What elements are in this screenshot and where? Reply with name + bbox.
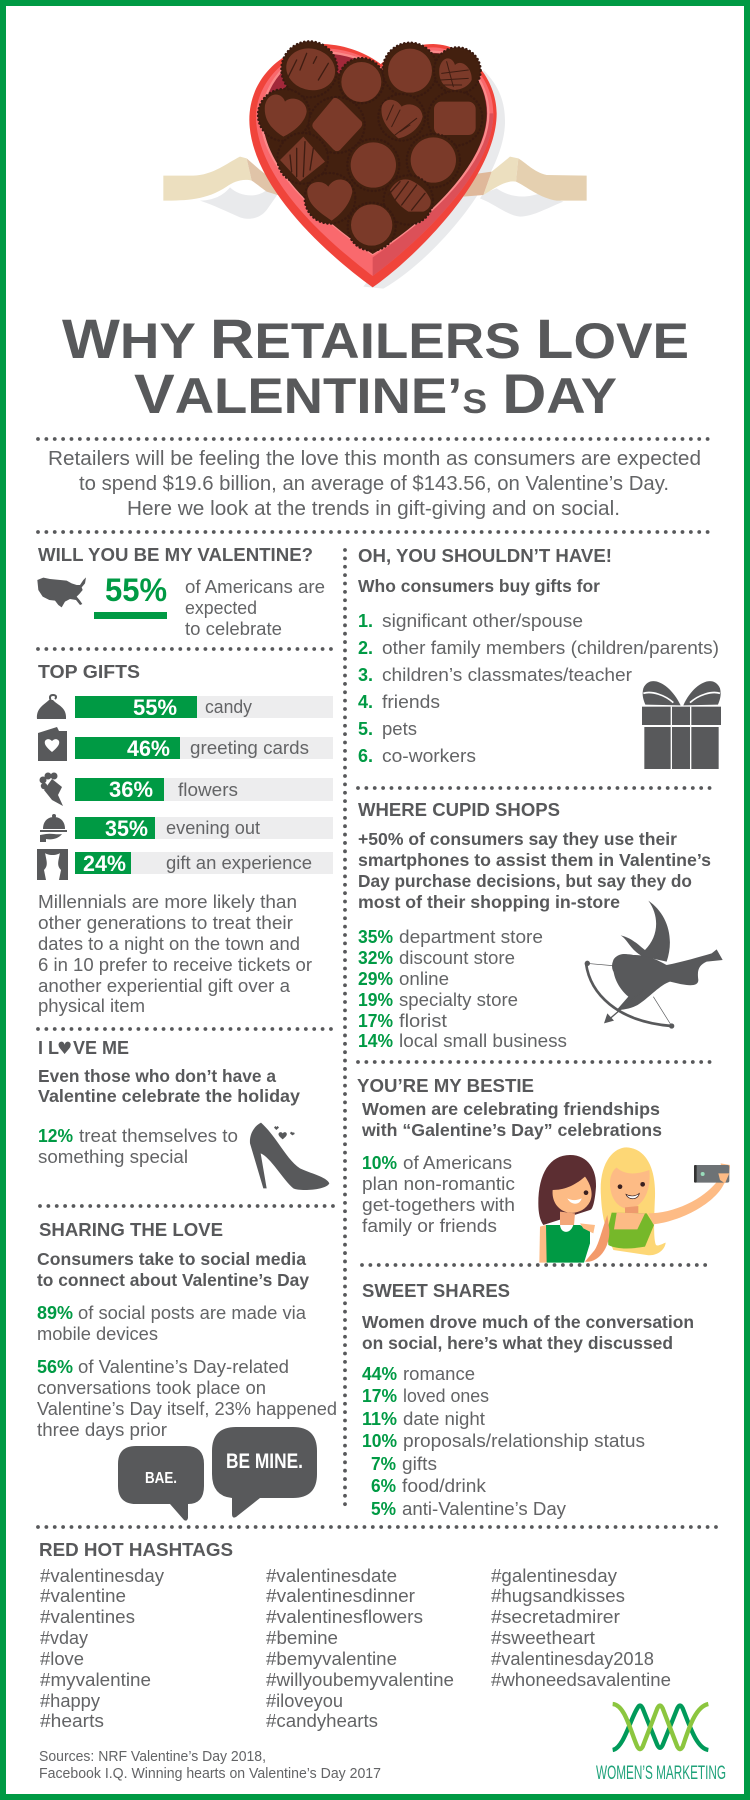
store list: department store: [399, 926, 543, 947]
topics list: proposals/relationship status: [403, 1430, 645, 1451]
heading: WILL YOU BE MY VALENTINE?: [38, 545, 313, 565]
hashtags column 1: #love: [40, 1648, 84, 1669]
heading: WHERE CUPID SHOPS: [358, 800, 560, 820]
subhead: on social, here’s what they discussed: [362, 1333, 673, 1353]
bar: candy: candy: [205, 696, 253, 717]
bar: candy: [75, 695, 333, 720]
store list: discount store: [399, 947, 515, 968]
intro text: Retailers will be feeling the love this month as consumers are expected: [48, 448, 701, 470]
text: millennials: another experiential gift over a: [38, 975, 291, 996]
stat: 56 percent: Valentine’s Day itself, 23% happened: [37, 1398, 337, 1419]
stat: 10 percent: 10%: [362, 1153, 397, 1173]
hashtags column 2: #iloveyou: [266, 1690, 343, 1711]
store list: 29%: [358, 969, 393, 989]
subhead: +50% of consumers say they use their: [358, 829, 677, 849]
bar: evening out: [75, 816, 333, 841]
hashtags column 3: #sweetheart: [491, 1627, 595, 1648]
illustration: two friends taking a selfie: [538, 1147, 730, 1263]
ranked list: 3.: [358, 665, 373, 685]
sources: Sources: NRF Valentine’s Day 2018,: [39, 1748, 266, 1765]
heading: OH, YOU SHOULDN’T HAVE!: [358, 546, 612, 566]
stat: 12 percent: [38, 1125, 238, 1167]
bar: gift an experience: [75, 851, 333, 876]
heading: ♥: [57, 1039, 72, 1059]
subhead: Day purchase decisions, but say they do: [358, 871, 692, 891]
stat: 55 percent: 55%: [105, 572, 167, 608]
ranked list: other family members (children/parents): [382, 637, 719, 658]
hashtags column 1: #myvalentine: [40, 1669, 151, 1690]
text: millennials: other generations to treat their: [38, 912, 293, 933]
icon: US map: [37, 577, 86, 607]
subhead: [38, 1066, 300, 1106]
store list: online: [399, 968, 449, 989]
panel: sharing the love: [37, 1220, 337, 1521]
topics list: 10%: [362, 1431, 397, 1451]
subhead: Even those who don’t have a: [38, 1066, 276, 1086]
ranked list: co-workers: [382, 745, 476, 766]
panel: you're my bestie: [357, 1076, 730, 1263]
ranked list: 6.: [358, 746, 373, 766]
panel: where cupid shops: [358, 800, 723, 1051]
icon: candy: [37, 695, 66, 719]
bar: evening out: 35%: [105, 816, 148, 841]
stat: 56 percent: [37, 1356, 337, 1440]
title: VALENTINE’ S DAY: [134, 362, 617, 425]
subhead: [361, 1099, 662, 1140]
hashtags column 1: #valentine: [40, 1585, 126, 1606]
stat underline: [94, 612, 167, 619]
bar: candy: 55%: [133, 695, 177, 720]
panel: i love me: [38, 1038, 329, 1190]
text: millennials: dates to a night on the town and: [38, 933, 300, 954]
stat: 89 percent: mobile devices: [37, 1323, 158, 1344]
text: millennials: physical item: [38, 995, 145, 1016]
topics list: 7%: [371, 1454, 396, 1474]
ranked list: 1.: [358, 611, 373, 631]
bar: greeting cards: greeting cards: [190, 737, 309, 758]
topics list: romance: [403, 1363, 475, 1384]
panel: will you be my valentine: [37, 545, 325, 639]
stat: 56 percent: of Valentine’s Day-related: [78, 1356, 289, 1377]
intro text: Here we look at the trends in gift-giving and on social.: [127, 498, 620, 520]
ranked list: 5.: [358, 719, 373, 739]
logo: women's marketing: [596, 1704, 726, 1784]
stat: 12 percent: treat themselves to: [79, 1125, 238, 1146]
hashtags column 2: #willyoubemyvalentine: [266, 1669, 454, 1690]
topics list: food/drink: [402, 1475, 487, 1496]
hashtags column 3: #valentinesday2018: [491, 1648, 654, 1669]
store list: 32%: [358, 948, 393, 968]
stat description: to celebrate: [185, 618, 282, 639]
hashtags column 1: #hearts: [40, 1710, 104, 1731]
store list: 14%: [358, 1031, 393, 1051]
stat: 10 percent: plan non-romantic: [362, 1173, 515, 1194]
stat description: of Americans are: [185, 576, 325, 597]
stat: 89 percent: 89%: [37, 1303, 73, 1323]
stat: 56 percent: three days prior: [37, 1419, 167, 1440]
hashtags column 3: #secretadmirer: [491, 1606, 620, 1627]
bar: gift an experience: gift an experience: [166, 852, 312, 873]
title: [62, 307, 689, 425]
stat: 12 percent: something special: [38, 1146, 188, 1167]
topics list: 6%: [371, 1476, 396, 1496]
sources: [39, 1748, 381, 1782]
bar: evening out: evening out: [166, 817, 260, 838]
ranked list: [358, 610, 719, 766]
icon: bouquet: [40, 772, 63, 806]
hashtags column 1: #happy: [40, 1690, 101, 1711]
store list: [358, 926, 567, 1051]
hashtags column 2: #valentinesflowers: [266, 1606, 423, 1627]
hashtags column 2: #bemine: [266, 1627, 338, 1648]
topics list: 5%: [371, 1499, 396, 1519]
heading: I L: [38, 1038, 59, 1058]
topics list: 44%: [362, 1364, 397, 1384]
speech bubble: be mine: BE MINE.: [226, 1450, 303, 1473]
stat: 10 percent: family or friends: [362, 1215, 497, 1236]
hashtags column 3: #hugsandkisses: [491, 1585, 625, 1606]
subhead: most of their shopping in-store: [358, 892, 620, 912]
subhead: Valentine celebrate the holiday: [38, 1086, 300, 1106]
hashtags column 1: #valentinesday: [40, 1565, 165, 1586]
subhead: to connect about Valentine’s Day: [37, 1270, 309, 1290]
topics list: [362, 1363, 645, 1519]
subhead: [358, 829, 711, 912]
ranked list: 2.: [358, 638, 373, 658]
subhead: [362, 1312, 694, 1353]
topics list: date night: [403, 1408, 485, 1429]
topics list: anti-Valentine’s Day: [402, 1498, 567, 1519]
speech bubble: bae: BAE.: [145, 1470, 177, 1487]
icon: serving cloche: [40, 814, 67, 842]
panel: red hot hashtags: [39, 1540, 671, 1731]
heading: SWEET SHARES: [362, 1281, 510, 1301]
bar: greeting cards: [75, 736, 333, 761]
hashtags column 3: #whoneedsavalentine: [491, 1669, 671, 1690]
subhead: Who consumers buy gifts for: [358, 576, 600, 596]
bar: flowers: flowers: [178, 779, 238, 800]
store list: specialty store: [399, 989, 518, 1010]
heading: TOP GIFTS: [38, 662, 140, 682]
text: millennials: [38, 891, 312, 1016]
hashtags column 2: #candyhearts: [266, 1710, 378, 1731]
subhead: smartphones to assist them in Valentine’s: [358, 850, 711, 870]
hashtags column 2: #bemyvalentine: [266, 1648, 397, 1669]
panel: top gifts: [37, 662, 333, 1016]
panel: sweet shares: [362, 1281, 694, 1519]
stat: 10 percent: of Americans: [403, 1152, 512, 1173]
hashtags column 1: #valentines: [40, 1606, 135, 1627]
store list: florist: [399, 1010, 447, 1031]
heading: VE ME: [73, 1038, 129, 1058]
topics list: loved ones: [403, 1385, 489, 1406]
text: millennials: Millennials are more likely than: [38, 891, 297, 912]
intro text: to spend $19.6 billion, an average of $143.56, on Valentine’s Day.: [79, 473, 669, 495]
heading: YOU’RE MY BESTIE: [357, 1076, 534, 1096]
heading: RED HOT HASHTAGS: [39, 1540, 233, 1560]
speech bubble: bae: [118, 1446, 204, 1521]
subhead: Consumers take to social media: [37, 1249, 306, 1269]
panel: oh you shouldn't have: [358, 546, 721, 769]
ranked list: friends: [382, 691, 440, 712]
ranked list: 4.: [358, 692, 373, 712]
store list: 35%: [358, 927, 393, 947]
hashtags column 1: #vday: [40, 1627, 89, 1648]
subhead: with “Galentine’s Day” celebrations: [361, 1120, 662, 1140]
subhead: [37, 1249, 309, 1290]
ranked list: significant other/spouse: [382, 610, 583, 631]
icon: greeting card: [38, 727, 67, 761]
hashtags column 1: [40, 1565, 165, 1731]
hashtags column 3: #galentinesday: [491, 1565, 618, 1586]
title: WHY RETAILERS LOVE: [62, 307, 689, 370]
stat: 89 percent: [37, 1302, 307, 1344]
icon: cupid silhouette: [585, 901, 723, 1029]
ranked list: pets: [382, 718, 417, 739]
illustration: heart-shaped chocolate box: [163, 41, 587, 289]
stat: 10 percent: get-togethers with: [362, 1194, 515, 1215]
hashtags column 2: #valentinesdate: [266, 1565, 397, 1586]
text: millennials: 6 in 10 prefer to receive tickets or: [38, 954, 312, 975]
store list: local small business: [399, 1030, 567, 1051]
store list: 19%: [358, 990, 393, 1010]
heading: SHARING THE LOVE: [39, 1220, 223, 1240]
stat description: expected: [185, 597, 257, 618]
topics list: gifts: [402, 1453, 437, 1474]
stat: 12 percent: 12%: [38, 1126, 73, 1146]
bar: flowers: [75, 777, 333, 802]
stat description: [185, 576, 325, 639]
bar: gift an experience: 24%: [83, 851, 126, 876]
ranked list: children’s classmates/teacher: [382, 664, 632, 685]
icon: high heel shoe: [250, 1123, 329, 1190]
sources: Facebook I.Q. Winning hearts on Valentine’s Day 2017: [39, 1765, 381, 1782]
hashtags column 2: #valentinesdinner: [266, 1585, 415, 1606]
hashtags column 2: [266, 1565, 454, 1731]
stat: 10 percent: [362, 1152, 515, 1236]
bar: greeting cards: 46%: [127, 736, 170, 761]
stat: 56 percent: conversations took place on: [37, 1377, 266, 1398]
bar: flowers: 36%: [109, 777, 153, 802]
stat: 89 percent: of social posts are made via: [78, 1302, 307, 1323]
topics list: 17%: [362, 1386, 397, 1406]
intro text: [48, 448, 701, 520]
subhead: Women are celebrating friendships: [362, 1099, 660, 1119]
stat: 56 percent: 56%: [37, 1357, 73, 1377]
icon: gift box: [642, 681, 721, 769]
store list: 17%: [358, 1011, 393, 1031]
subhead: Women drove much of the conversation: [362, 1312, 694, 1332]
chocolates: [258, 41, 482, 251]
hashtags column 3: [491, 1565, 671, 1690]
icon: curtains: [37, 849, 68, 880]
speech bubble: be mine: [212, 1427, 317, 1518]
topics list: 11%: [362, 1409, 397, 1429]
